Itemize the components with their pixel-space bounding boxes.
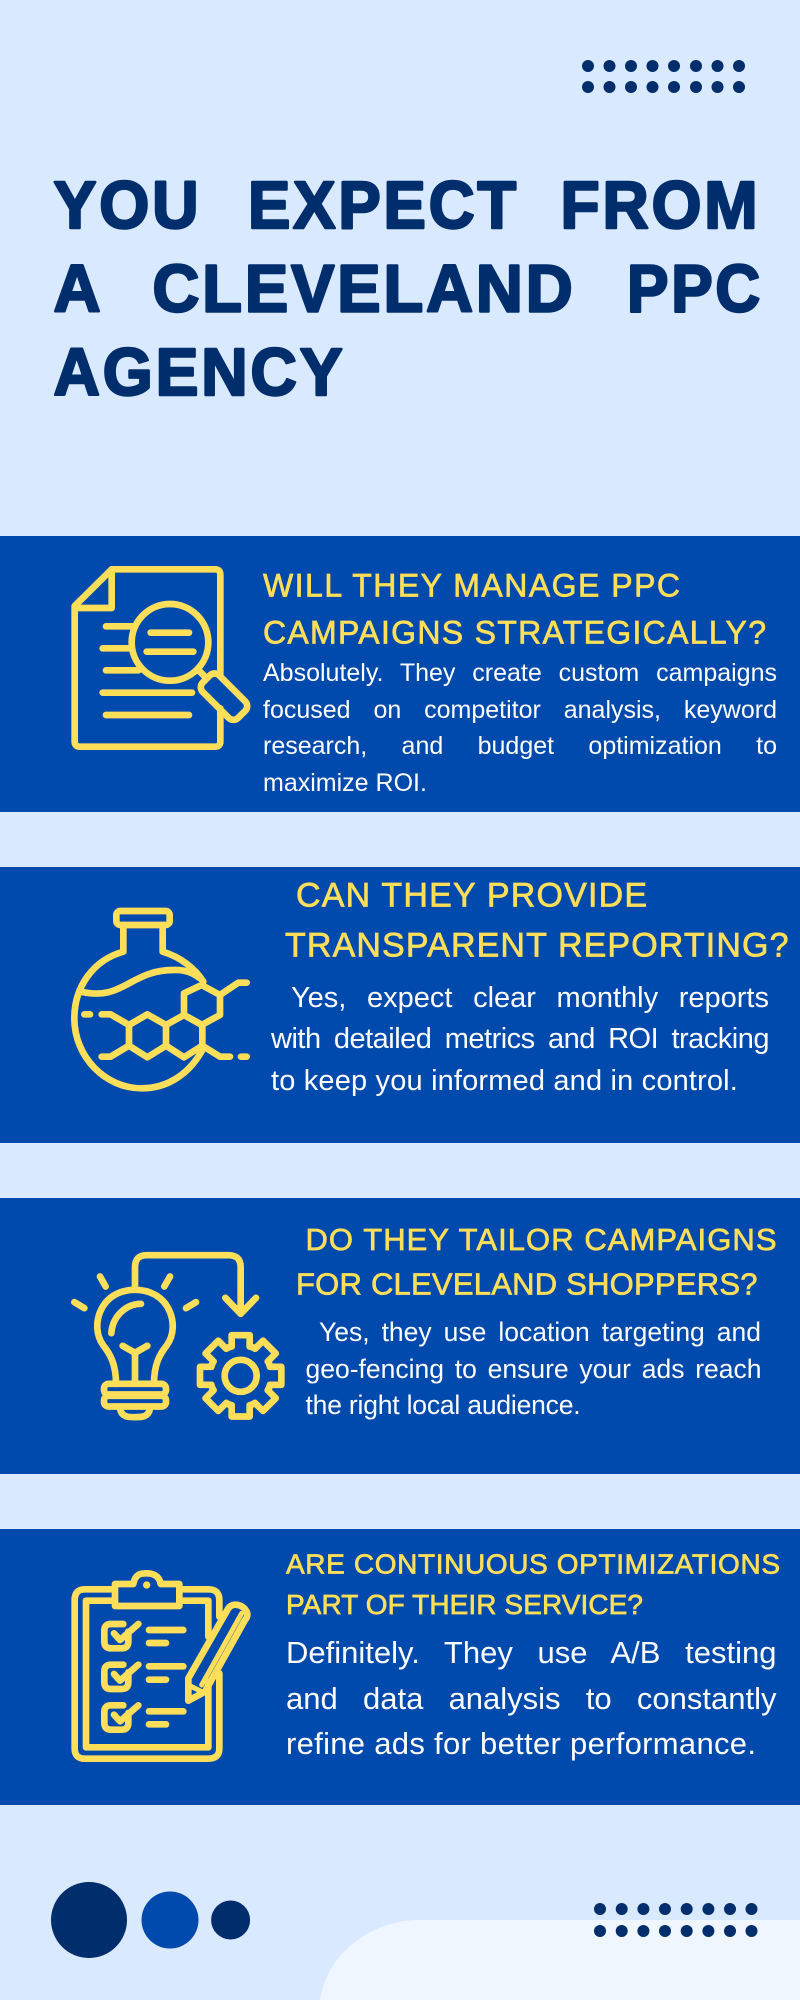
body text xyxy=(286,1635,776,1761)
icon: document with magnifying glass xyxy=(75,569,250,747)
dot grid: top right xyxy=(582,60,745,93)
icon: light bulb, arrow and gear xyxy=(74,1255,281,1417)
heading: CAN THEY PROVIDE xyxy=(296,877,647,915)
body text: Yes, they use location targeting and xyxy=(319,1316,761,1346)
title xyxy=(53,168,763,410)
heading xyxy=(285,877,788,965)
heading: PART OF THEIR SERVICE? xyxy=(286,1589,643,1620)
heading xyxy=(263,568,766,650)
body text: Absolutely. They create custom campaigns xyxy=(263,659,777,687)
heading: CAMPAIGNS STRATEGICALLY? xyxy=(263,614,766,650)
panel: will they manage PPC campaigns strategically xyxy=(0,536,800,812)
panel: are continuous optimizations part of their service xyxy=(0,1529,800,1805)
icon: clipboard checklist with pencil xyxy=(75,1573,247,1759)
title: PPC xyxy=(627,252,763,326)
heading xyxy=(296,1221,776,1301)
heading: WILL THEY MANAGE PPC xyxy=(263,568,680,604)
title: AGENCY xyxy=(54,335,346,410)
body text: focused on competitor analysis, keyword xyxy=(263,696,777,724)
body text: Yes, expect clear monthly reports xyxy=(291,982,769,1014)
body text xyxy=(263,659,777,797)
body text: maximize ROI. xyxy=(263,769,427,797)
body text: Definitely. They use A/B testing xyxy=(286,1635,776,1670)
body text: to keep you informed and in control. xyxy=(271,1065,738,1097)
title: A xyxy=(54,252,104,326)
body text: the right local audience. xyxy=(306,1390,580,1420)
heading: TRANSPARENT REPORTING? xyxy=(285,927,788,965)
icon: flask with molecule xyxy=(74,911,247,1088)
heading: ARE CONTINUOUS OPTIMIZATIONS xyxy=(286,1548,780,1579)
heading: FOR CLEVELAND SHOPPERS? xyxy=(296,1266,758,1301)
panel: can they provide transparent reporting xyxy=(0,867,800,1143)
body text xyxy=(271,982,769,1097)
body text: research, and budget optimization to xyxy=(263,732,777,760)
body text: geo-fencing to ensure your ads reach xyxy=(306,1354,762,1384)
heading xyxy=(286,1548,780,1620)
body text xyxy=(306,1316,762,1420)
body text: and data analysis to constantly xyxy=(286,1681,776,1716)
title: CLEVELAND xyxy=(152,252,576,326)
body text: refine ads for better performance. xyxy=(286,1726,756,1761)
body text: with detailed metrics and ROI tracking xyxy=(271,1023,769,1055)
title: YOU xyxy=(54,168,202,243)
title: FROM xyxy=(560,168,760,243)
title: EXPECT xyxy=(248,168,519,243)
heading: DO THEY TAILOR CAMPAIGNS xyxy=(306,1221,776,1256)
panel: do they tailor campaigns for cleveland shoppers xyxy=(0,1198,800,1474)
